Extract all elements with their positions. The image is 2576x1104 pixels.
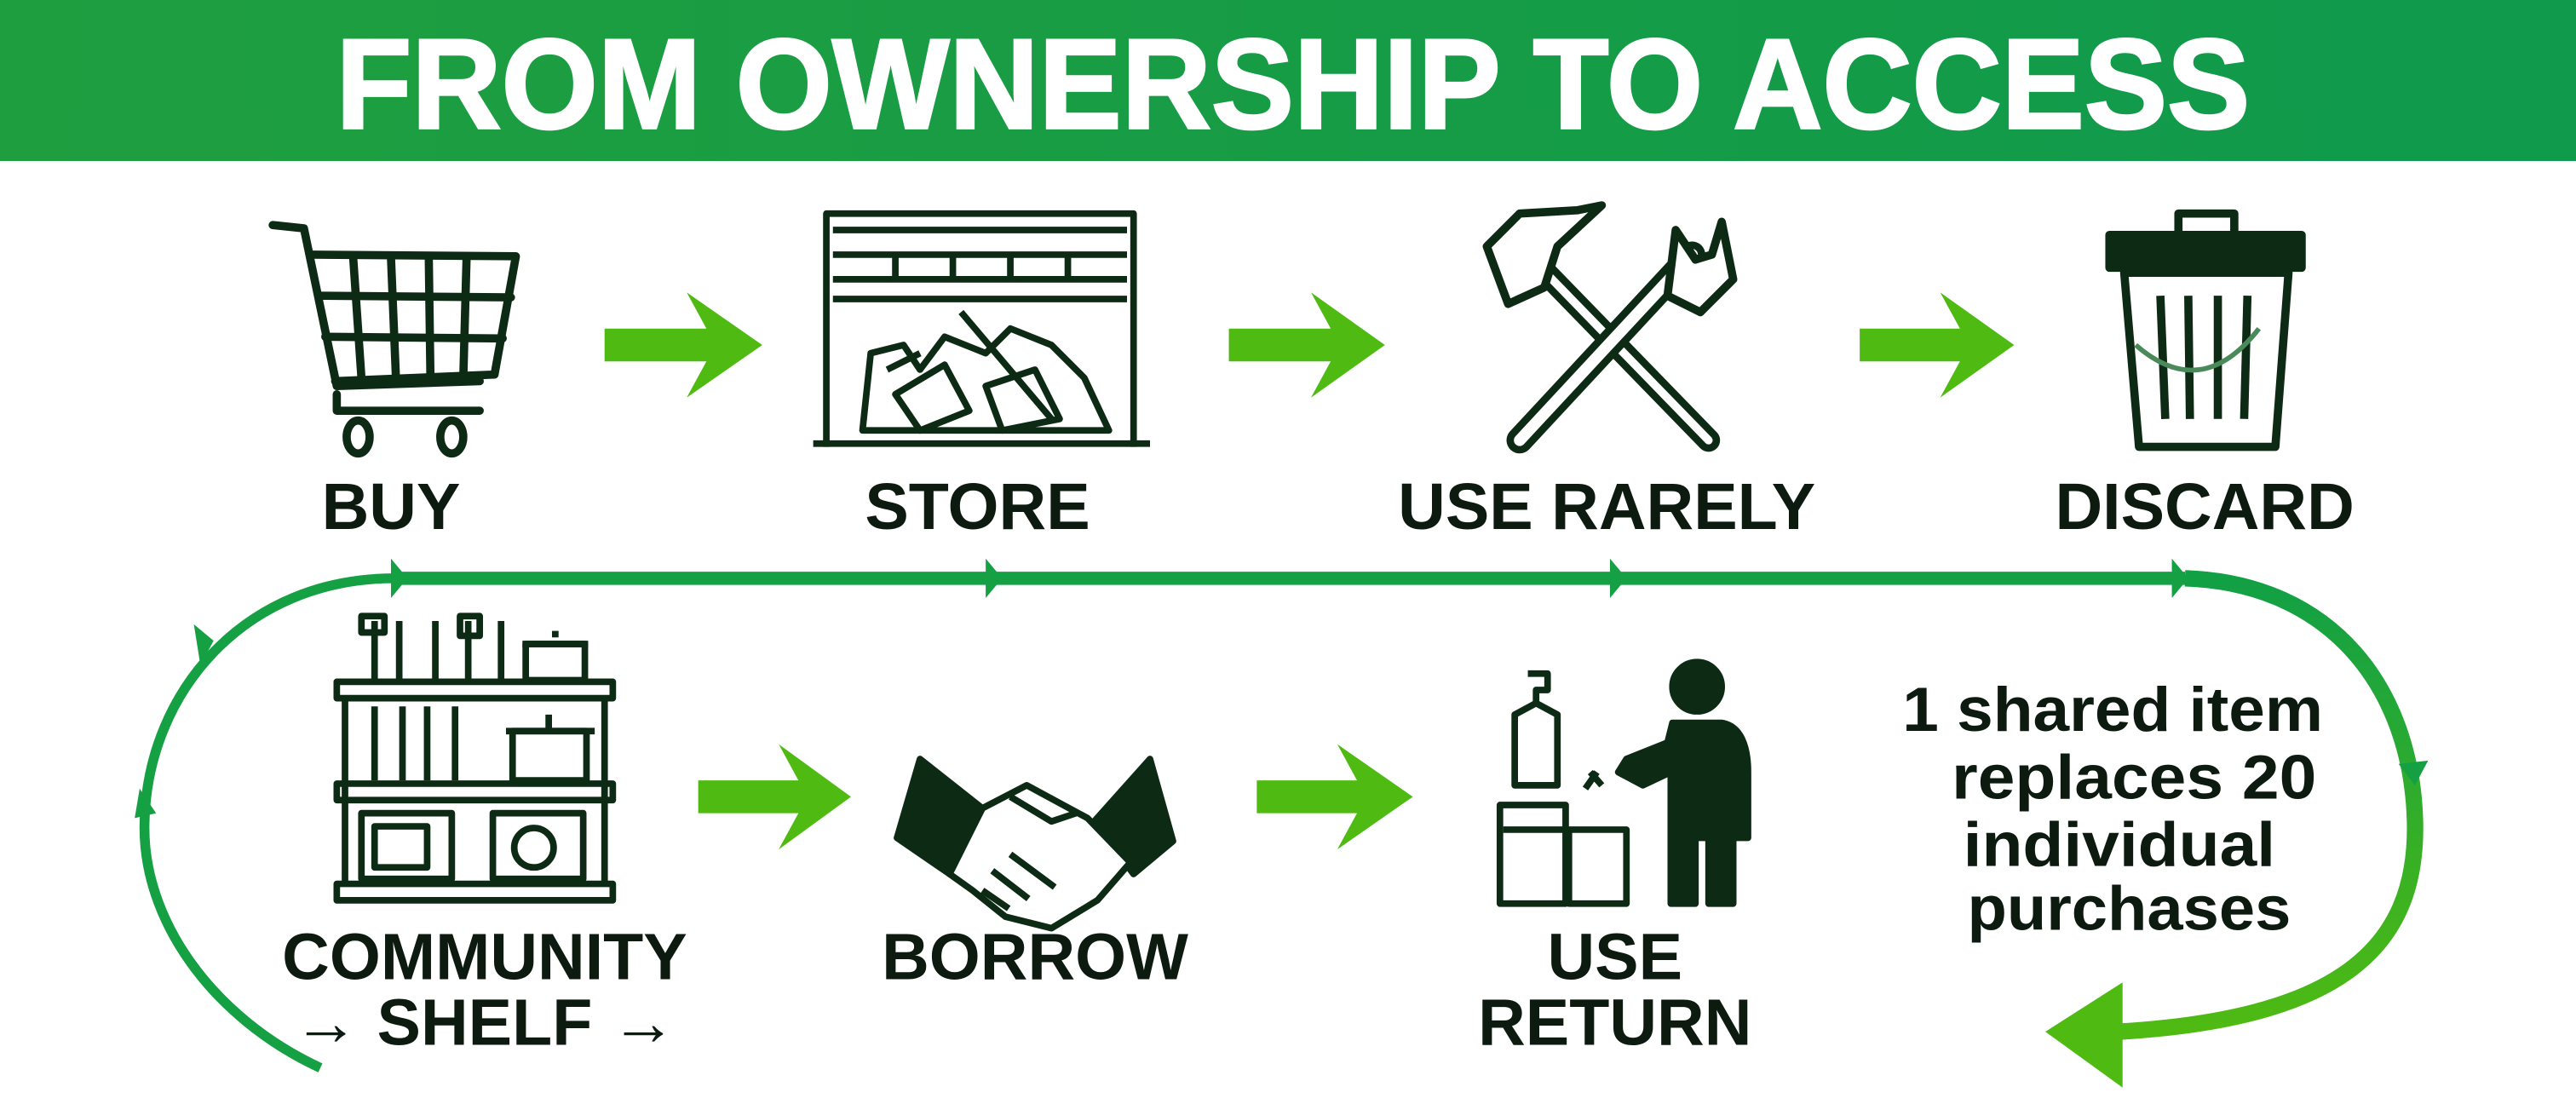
label: USE RARELY: USE RARELY <box>1398 470 1815 543</box>
label: BORROW: BORROW <box>882 920 1188 993</box>
callout: shared item statistic: purchases <box>1967 874 2291 944</box>
icon: person using and returning item <box>1500 662 1748 904</box>
label: USE RETURN <box>1478 920 1751 1060</box>
callout: shared item statistic: individual <box>1964 809 2275 879</box>
icon: trash can <box>2109 214 2302 447</box>
label: COMMUNITY SHELF: COMMUNITY <box>282 920 687 993</box>
title banner <box>0 0 2576 161</box>
label: COMMUNITY SHELF: → SHELF → <box>293 986 676 1060</box>
callout: shared item statistic: replaces 20 <box>1952 742 2316 812</box>
arrow 3 <box>1860 292 2014 398</box>
arrow 5 <box>1256 745 1413 849</box>
arrow 4 <box>699 745 851 849</box>
arrow 2 <box>1229 292 1385 398</box>
icon: crossed hammer and wrench <box>1486 205 1734 440</box>
icon: shopping cart <box>273 225 516 453</box>
icon: handshake <box>897 759 1173 929</box>
label: STORE: STORE <box>865 470 1090 543</box>
arrow 1 <box>605 292 762 398</box>
label: BUY: BUY <box>322 470 460 543</box>
callout: shared item statistic <box>1902 675 2323 944</box>
label: USE RETURN: USE <box>1547 920 1682 993</box>
callout: shared item statistic: 1 shared item <box>1902 675 2323 745</box>
label: USE RETURN: RETURN <box>1478 986 1751 1060</box>
title: FROM OWNERSHIP TO ACCESS <box>336 12 2250 155</box>
loop arrow <box>135 559 2428 1088</box>
icon: storage unit <box>814 214 1150 447</box>
icon: community shelf <box>336 616 612 900</box>
label: DISCARD: DISCARD <box>2055 470 2355 543</box>
label: COMMUNITY SHELF <box>282 920 687 1060</box>
